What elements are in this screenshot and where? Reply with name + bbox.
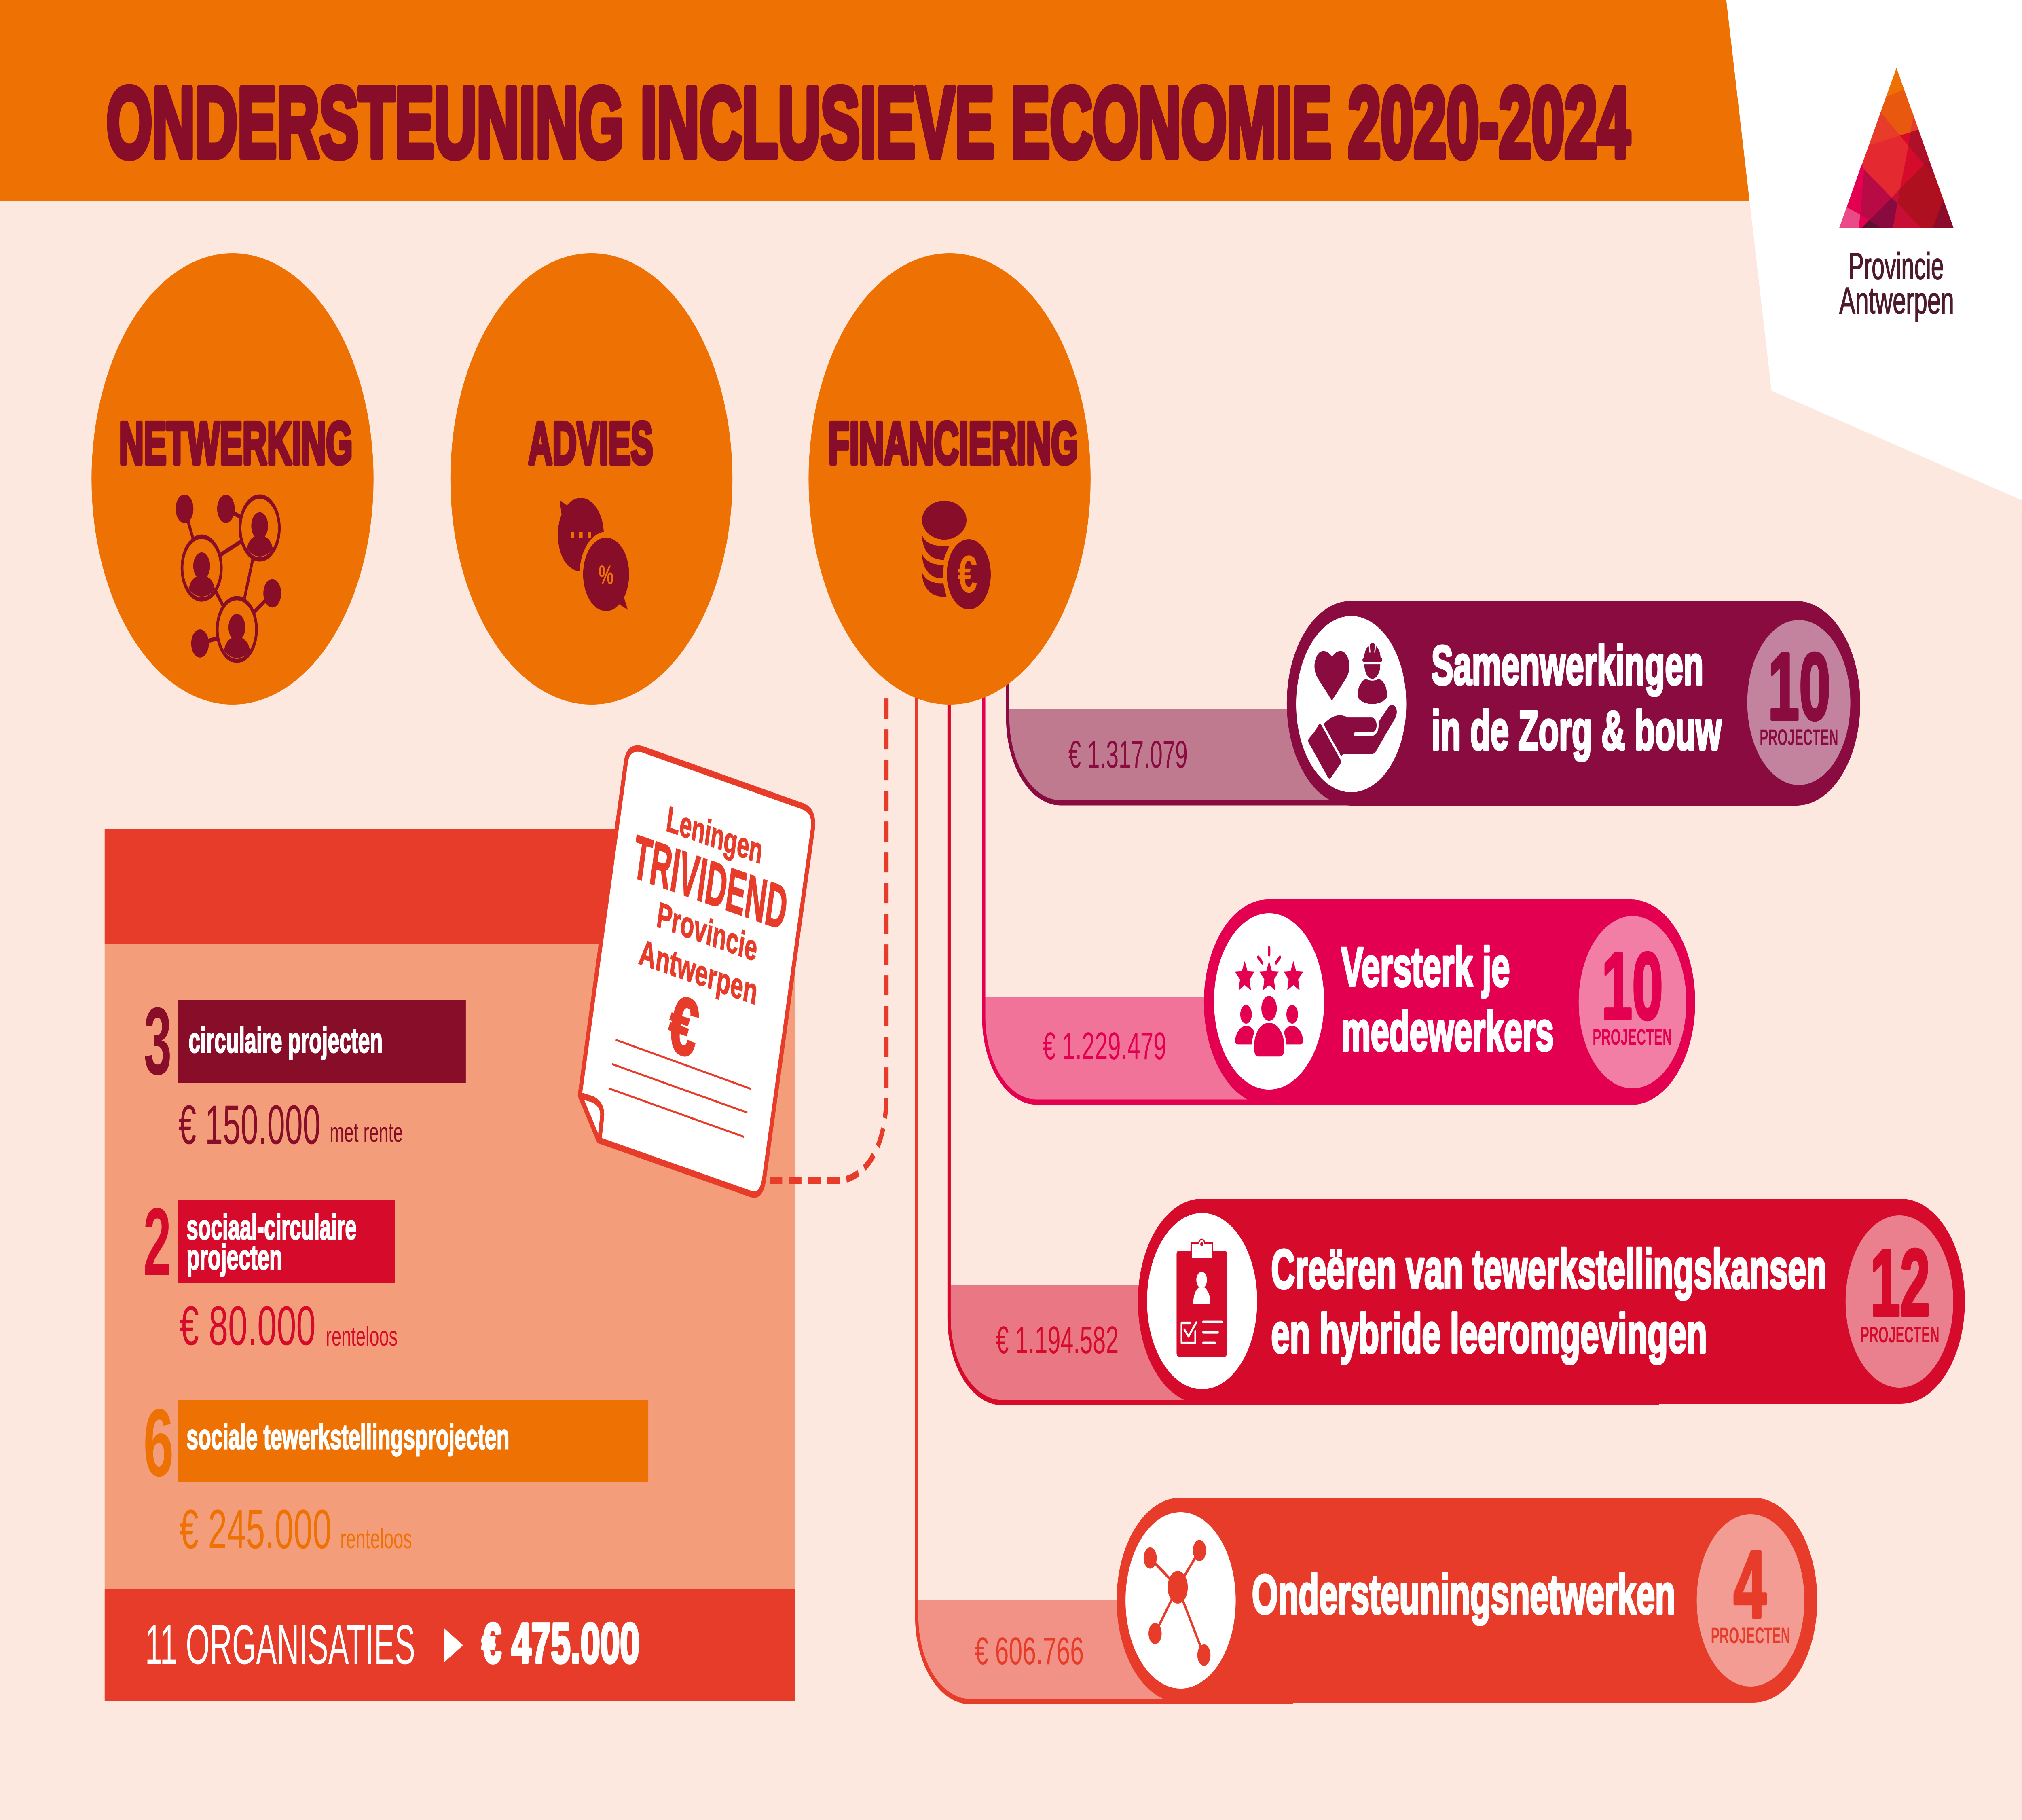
label (1341, 937, 1554, 1062)
badge: 4 projecten (1697, 1514, 1804, 1687)
circle: Advies (451, 253, 732, 705)
label bar: circulaire projecten: circulaire projecten (188, 1021, 383, 1060)
badge: 12 projecten: 12 (1870, 1230, 1930, 1335)
label bar: circulaire projecten (178, 1000, 466, 1083)
badge: 10 projecten: PROJECTEN (1760, 725, 1838, 750)
total amount: € 475.000 (482, 1611, 640, 1675)
project bar: Samenwerkingen in de Zorg & bouw (1068, 601, 1860, 806)
amount: 150.000 met rente (178, 1094, 403, 1156)
bar: Ondersteuningsnetwerken tail and connector (917, 667, 1293, 1701)
bar: Versterk je medewerkers tail and connector (984, 667, 1289, 1102)
label: en hybride leeromgevingen (1271, 1303, 1707, 1365)
icon: coins with euro: € (958, 544, 977, 603)
logo triangle (1839, 68, 1954, 228)
arrow: total (444, 1628, 463, 1663)
amount: 245.000 renteloos (180, 1499, 412, 1560)
badge: 10 projecten: PROJECTEN (1593, 1024, 1672, 1050)
icon: heart, worker and hand (1296, 616, 1407, 792)
badge: 12 projecten (1846, 1215, 1953, 1388)
label bar: sociaal-circulaire projecten (178, 1200, 395, 1283)
number: 2 social-circular projects: 2 (143, 1188, 171, 1295)
amount: 245.000 renteloos: € 245.000 (180, 1499, 332, 1560)
amount: 80.000 renteloos: renteloos (326, 1321, 398, 1352)
label: Versterk je (1341, 937, 1510, 998)
amount: 80.000 renteloos (180, 1295, 398, 1357)
label: Samenwerkingen (1431, 635, 1703, 696)
pill (1117, 1498, 1817, 1703)
logo: Provincie Antwerpen (1839, 68, 1954, 322)
number: 3 circular projects: 3 (144, 987, 171, 1094)
heading: Advies: ADVIES (528, 410, 653, 476)
document text: Leningen: Leningen (664, 799, 765, 872)
label bar: sociale tewerkstellingsprojecten (178, 1400, 648, 1482)
icon: speech bubbles: % (599, 560, 613, 590)
heading: Netwerking: NETWERKING (119, 410, 353, 476)
amount: 150.000 met rente: € 150.000 (178, 1094, 320, 1156)
document euro sign: € (664, 978, 703, 1075)
total: 11 organisaties: 11 ORGANISATIES (145, 1614, 415, 1676)
badge: 4 projecten: PROJECTEN (1711, 1623, 1790, 1648)
heading: Financiering: FINANCIERING (828, 410, 1078, 476)
amount: € 606.766 (975, 1630, 1084, 1672)
icon: coins with euro (922, 501, 991, 609)
badge: 4 projecten: 4 (1734, 1532, 1766, 1637)
number: 6 social employment projects: 6 (143, 1389, 173, 1496)
logo text line 1: Provincie (1849, 245, 1944, 287)
header band (0, 0, 1749, 201)
pill (1204, 899, 1695, 1105)
project bar: Creeren van tewerkstellingskansen (996, 1199, 1965, 1404)
label: Ondersteuningsnetwerken (1252, 1564, 1675, 1625)
title: ONDERSTEUNING INCLUSIEVE ECONOMIE 2020-2024 (106, 67, 1630, 178)
label: medewerkers (1341, 1001, 1554, 1062)
connector: dashed line to loans document (770, 688, 886, 1181)
badge: 12 projecten: PROJECTEN (1861, 1322, 1940, 1347)
white logo corner panel (1726, 0, 2022, 500)
document text: Antwerpen: Antwerpen (637, 932, 760, 1012)
document text: Provincie: Provincie (655, 895, 760, 969)
circle: Financiering (808, 253, 1091, 705)
label (1271, 1239, 1827, 1365)
badge: 10 projecten (1747, 620, 1851, 785)
project bar: Ondersteuningsnetwerken (975, 1498, 1817, 1703)
badge: 10 projecten: 10 (1768, 634, 1830, 739)
amount: 80.000 renteloos: € 80.000 (180, 1295, 316, 1357)
project bar: Versterk je medewerkers (1043, 899, 1695, 1105)
badge: 10 projecten: 10 (1602, 933, 1663, 1039)
document: Leningen Trividend (580, 749, 813, 1195)
circle: Netwerking (91, 253, 374, 705)
label bar: sociale tewerkstellingsprojecten: sociale tewerkstellingsprojecten (186, 1418, 509, 1456)
badge: 10 projecten (1579, 916, 1686, 1088)
panel: Trividend loans (105, 829, 795, 1701)
label (1431, 635, 1722, 762)
pill (1138, 1199, 1965, 1404)
amount: € 1.317.079 (1068, 733, 1188, 776)
amount: € 1.229.479 (1043, 1024, 1166, 1067)
document text: TRIVIDEND: TRIVIDEND (629, 822, 791, 944)
logo text line 2: Antwerpen (1839, 280, 1954, 322)
icon: people network (176, 495, 281, 661)
bar: Creeren tail and connector (949, 667, 1659, 1403)
label: Creëren van tewerkstellingskansen (1271, 1239, 1827, 1300)
amount: € 1.194.582 (996, 1318, 1119, 1361)
icon: clipboard with person (1147, 1213, 1257, 1389)
amount: 245.000 renteloos: renteloos (340, 1524, 412, 1555)
icon: stars and team (1214, 913, 1324, 1090)
label bar: sociaal-circulaire projecten: sociaal-circulaire (186, 1208, 357, 1247)
label bar: sociaal-circulaire projecten: projecten (186, 1238, 282, 1277)
label: in de Zorg & bouw (1431, 700, 1722, 762)
icon: network nodes (1125, 1512, 1236, 1689)
icon: speech bubbles (558, 498, 632, 617)
bar: Samenwerkingen tail and connector (1008, 667, 1365, 803)
pill (1287, 601, 1860, 806)
amount: 150.000 met rente: met rente (330, 1117, 403, 1148)
